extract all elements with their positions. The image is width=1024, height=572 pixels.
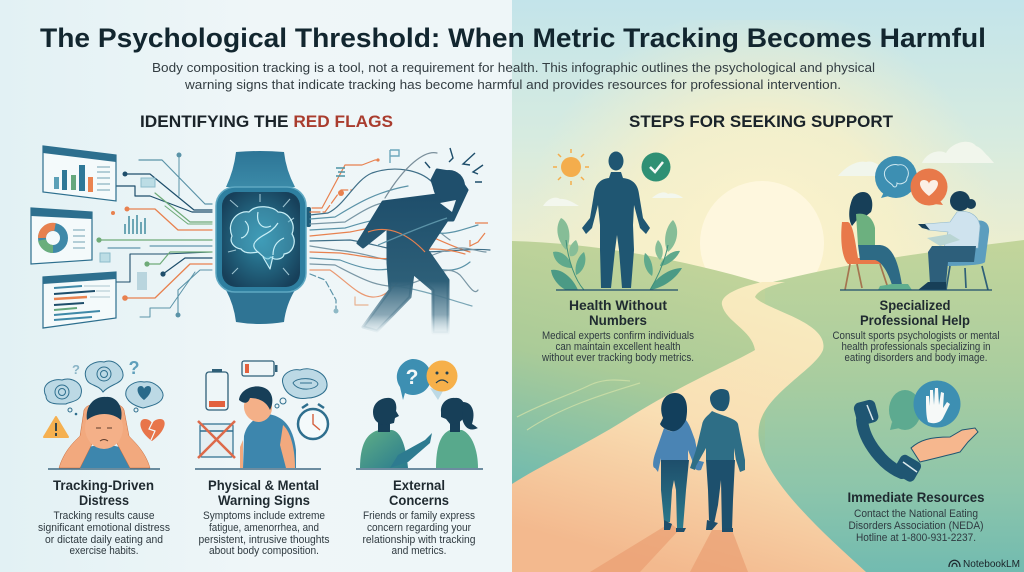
- intro text: Body composition tracking is a tool, not a requirement for health. This infographic outlines the psychological and physical: [152, 61, 875, 75]
- body text: about body composition.: [209, 545, 319, 557]
- winding path: [512, 282, 866, 572]
- card: tracking-driven distress: [38, 358, 171, 557]
- card: external concerns: [356, 359, 483, 557]
- body text: eating disorders and body image.: [844, 352, 988, 364]
- circuit lines left: [100, 155, 212, 317]
- body text: [362, 510, 476, 557]
- heading: [208, 477, 319, 508]
- icon: phone, help bubble and open hand: [853, 380, 978, 484]
- plants: [551, 218, 682, 290]
- body text: health professionals specializing in: [842, 341, 990, 353]
- illustration: data windows, smartwatch and distressed figure: [31, 146, 490, 333]
- man: [710, 389, 730, 411]
- heading: [389, 477, 449, 508]
- thought clouds: [44, 361, 163, 408]
- body text: Symptoms include extreme: [203, 510, 325, 522]
- heading: Tracking-Driven: [53, 477, 154, 493]
- body text: Medical experts confirm individuals: [542, 330, 695, 342]
- check badge: [642, 152, 670, 182]
- heading: Distress: [79, 492, 129, 508]
- illustration: stressed person: [44, 358, 165, 469]
- woman: [660, 393, 687, 432]
- sun: [553, 149, 589, 185]
- brain speech bubble: [875, 156, 917, 198]
- heading: Immediate Resources: [848, 489, 985, 505]
- heading: Health Without: [569, 297, 667, 313]
- body text: [832, 330, 1000, 364]
- card: health without numbers: [541, 149, 695, 364]
- body text: concern regarding your: [367, 522, 471, 534]
- window: progress bars: [43, 272, 116, 328]
- intro text: [152, 61, 875, 92]
- left hill: [512, 241, 765, 572]
- circuit lines right: [310, 153, 490, 311]
- body text: [38, 510, 171, 557]
- chairs: [841, 222, 884, 264]
- title: The Psychological Threshold: When Metric Tracking Becomes Harmful: [40, 23, 986, 53]
- illustration: stressed person: ?: [72, 362, 80, 377]
- panel: left background: [0, 0, 512, 572]
- heading: [860, 297, 970, 328]
- heading: [569, 297, 667, 328]
- heart speech bubble: [910, 168, 948, 206]
- card: physical and mental warning signs: [195, 361, 330, 557]
- right hill: [765, 240, 1024, 572]
- body text: without ever tracking body metrics.: [541, 352, 694, 364]
- card: immediate resources: [848, 380, 985, 544]
- illustration: two friends talking: [356, 359, 483, 469]
- body text: significant emotional distress: [38, 522, 171, 534]
- heading: External: [393, 477, 445, 493]
- window: bar chart: [43, 146, 116, 201]
- logo: NotebookLM: NotebookLM: [963, 559, 1020, 570]
- illustration: two friends talking: ?: [406, 366, 418, 389]
- body text: Friends or family express: [363, 510, 476, 522]
- window: donut chart: [31, 208, 92, 264]
- standing figure: [582, 172, 650, 288]
- sun: [700, 181, 824, 305]
- brain: [230, 207, 294, 269]
- heading: Specialized: [880, 297, 950, 313]
- card: specialized professional help: [832, 142, 1000, 364]
- body text: fatigue, amenorrhea, and: [209, 522, 319, 534]
- heading: [53, 477, 154, 508]
- heading: Warning Signs: [218, 492, 310, 508]
- body text: [541, 330, 695, 364]
- patient: [851, 192, 872, 216]
- body text: [198, 510, 330, 557]
- figure: distressed silhouette: [358, 170, 467, 333]
- body text: persistent, intrusive thoughts: [198, 534, 330, 546]
- body text: Contact the National Eating: [854, 508, 978, 520]
- body text: can maintain excellent health: [556, 341, 680, 353]
- illustration: couple walking on path: [590, 389, 748, 572]
- body text: exercise habits.: [70, 545, 138, 557]
- intro text: warning signs that indicate tracking has become harmful and provides resources for professional intervention.: [184, 78, 841, 92]
- heading: Professional Help: [860, 312, 970, 328]
- body text: relationship with tracking: [362, 534, 476, 546]
- illustration: stressed person: ?: [128, 358, 140, 378]
- heading: Concerns: [389, 492, 449, 508]
- broken heart: [140, 419, 165, 441]
- illustration: standing figure with plants: [543, 149, 683, 290]
- illustration: fatigued person: [195, 361, 328, 469]
- illustration: therapy session: [838, 142, 994, 290]
- heading: identifying the red flags: IDENTIFYING THE RED FLAGS: [140, 112, 393, 131]
- body text: Disorders Association (NEDA): [848, 520, 984, 532]
- body text: Tracking results cause: [54, 510, 154, 522]
- body text: Hotline at 1-800-931-2237.: [856, 532, 976, 544]
- warning triangle: [44, 417, 68, 437]
- heading: steps for seeking support: STEPS FOR SEEKING SUPPORT: [629, 112, 894, 131]
- heading: Numbers: [589, 312, 647, 328]
- body text: or dictate daily eating and: [45, 534, 163, 546]
- panel: right background: [512, 0, 1024, 572]
- icon: smartwatch with brain: [216, 151, 311, 324]
- body text: Consult sports psychologists or mental: [832, 330, 1000, 342]
- heading: Physical & Mental: [208, 477, 319, 493]
- counsellor: [950, 191, 970, 211]
- body text: [848, 508, 984, 544]
- body text: and metrics.: [392, 545, 446, 557]
- clouds: [922, 142, 994, 163]
